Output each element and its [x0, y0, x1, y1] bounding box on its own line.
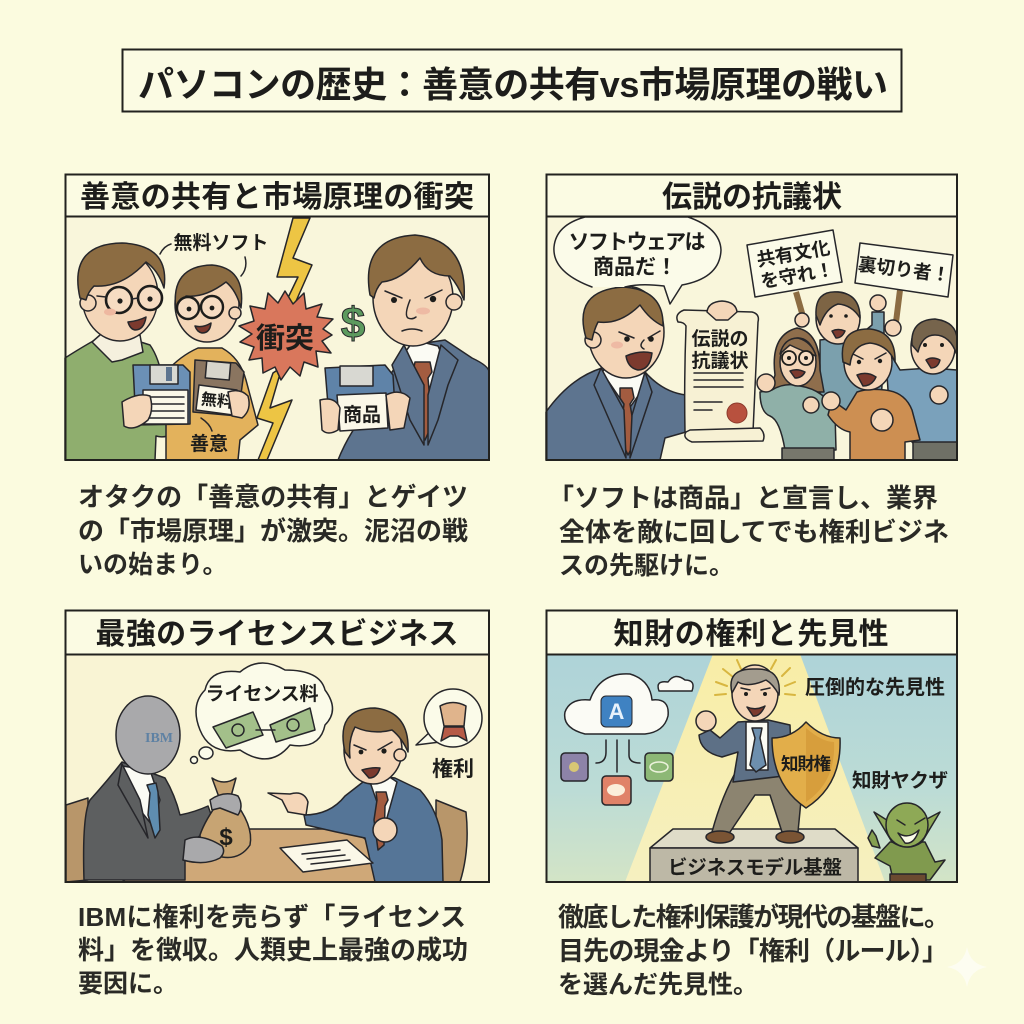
panel 4 heading — [546, 610, 957, 654]
panel 3 heading: 最強のライセンスビジネス — [96, 618, 458, 651]
title: パソコンの歴史：善意の共有vs市場原理の戦い — [138, 64, 888, 105]
panel 1 illustration background — [65, 216, 489, 460]
speech bubble — [554, 217, 721, 304]
panel 3 heading — [66, 610, 489, 654]
floppy: blue — [122, 365, 190, 428]
person: man in suit — [546, 286, 686, 460]
money bills — [213, 708, 315, 748]
text block 4: を選んだ先見性。 — [558, 971, 758, 999]
protester: right man — [885, 319, 957, 460]
text block 1: いの始まり。 — [78, 551, 228, 579]
sparkle mark — [947, 947, 987, 987]
scroll document: 抗議状 — [691, 350, 749, 372]
contract document — [280, 840, 373, 872]
text block 4: 目先の現金より「権利（ルール）」 — [558, 936, 948, 966]
shield — [772, 722, 840, 808]
floppy: 商品: 商品 — [343, 404, 381, 426]
panel 2 frame — [546, 174, 957, 460]
panel: 知財の権利と先見性 — [546, 610, 957, 882]
person: yellow sweater — [166, 265, 258, 460]
text block 2: スの先駆けに。 — [559, 552, 734, 580]
text block 4: 徹底した権利保護が現代の基盤に。 — [558, 902, 950, 932]
lightning bolt — [257, 218, 312, 460]
panel 1 frame — [66, 174, 489, 460]
scroll document — [677, 301, 764, 442]
panel 4 frame — [546, 610, 957, 882]
panel 3 frame — [66, 610, 489, 882]
text block 1: オタクの「善意の共有」とゲイツ — [78, 482, 468, 512]
label: 無料ソフト: 無料ソフト — [173, 232, 269, 254]
panel: 最強のライセンスビジネス — [65, 610, 489, 882]
panel 1 heading: 善意の共有と市場原理の衝突 — [80, 181, 474, 214]
panel 2 illustration background — [546, 216, 957, 460]
person: blue suit man — [268, 708, 443, 882]
money bag — [183, 778, 251, 863]
pedestal — [650, 829, 858, 882]
label: 圧倒的な先見性: 圧倒的な先見性 — [805, 676, 945, 699]
thought cloud: ライセンス料 — [206, 683, 318, 705]
text block 3: 要因に。 — [78, 970, 178, 998]
text block 2: 全体を敵に回してでも権利ビジネ — [559, 517, 949, 547]
sign: 共有文化を守れ — [747, 230, 842, 297]
panel 2 heading — [546, 174, 957, 216]
person: businessman — [338, 235, 489, 460]
label: 善意: 善意 — [190, 433, 228, 455]
starburst: 衝突 — [239, 291, 333, 380]
text block 3 — [78, 902, 468, 998]
rights speech bubble — [416, 689, 482, 747]
app icons — [561, 753, 673, 805]
text block 1 — [78, 482, 468, 579]
sign: 共有文化を守れ: 共有文化 — [755, 237, 832, 270]
cloud with app icon: A — [609, 699, 625, 724]
sign poles — [796, 290, 900, 330]
text block 1: の「市場原理」が激突。泥沼の戦 — [78, 516, 468, 546]
title — [122, 50, 902, 112]
sign: 共有文化を守れ: を守れ！ — [759, 259, 835, 292]
person: IBM faceless — [84, 696, 223, 880]
text block 3: 料」を徴収。人類史上最強の成功 — [78, 935, 468, 965]
panel 2 heading: 伝説の抗議状 — [662, 181, 842, 214]
sign: 裏切り者: 裏切り者！ — [857, 253, 951, 286]
floppy: 商品 — [320, 365, 410, 433]
protester: back man — [795, 292, 886, 420]
text block 2 — [548, 483, 949, 580]
money bag: $ — [219, 824, 233, 851]
label: 権利: 権利 — [432, 758, 474, 781]
person: IBM faceless: IBM — [145, 731, 173, 746]
icon: dollar: $ — [341, 299, 365, 348]
label: 善意 — [190, 418, 228, 455]
protester: orange sweater — [822, 329, 920, 460]
goblin — [868, 803, 945, 882]
sky background — [546, 654, 957, 882]
person: green sweater — [65, 243, 182, 460]
scroll document: 伝説の — [691, 328, 749, 350]
speech bubble: ソフトウェアは — [568, 231, 706, 254]
label: 無料ソフト — [160, 232, 269, 276]
protester: woman — [757, 328, 836, 460]
text block 4 — [558, 902, 950, 999]
floppy: brown 無料 — [193, 360, 249, 418]
panel 4 heading: 知財の権利と先見性 — [614, 618, 888, 651]
pedestal: ビジネスモデル基盤 — [668, 856, 842, 879]
spotlight — [625, 654, 885, 882]
starburst: 衝突: 衝突 — [256, 322, 314, 355]
panel: 善意の共有と市場原理の衝突 — [65, 174, 489, 460]
text block 2: 「ソフトは商品」と宣言し、業界 — [548, 483, 938, 513]
panel: 伝説の抗議状 — [546, 174, 957, 460]
text block 3: IBMに権利を売らず「ライセンス — [78, 902, 466, 932]
speech bubble: 商品だ！ — [593, 256, 677, 279]
table — [122, 829, 417, 882]
rays — [715, 660, 795, 695]
sign: 裏切り者 — [855, 243, 953, 297]
thought cloud — [190, 663, 332, 764]
cloud with app icon — [565, 674, 693, 772]
person: triumphant man — [696, 665, 804, 843]
shield: 知財権 — [781, 754, 831, 774]
label: 知財ヤクザ: 知財ヤクザ — [852, 770, 948, 792]
panel 3 illustration background — [65, 654, 489, 882]
chairs — [66, 798, 467, 882]
floppy: brown 無料: 無料 — [200, 390, 234, 412]
